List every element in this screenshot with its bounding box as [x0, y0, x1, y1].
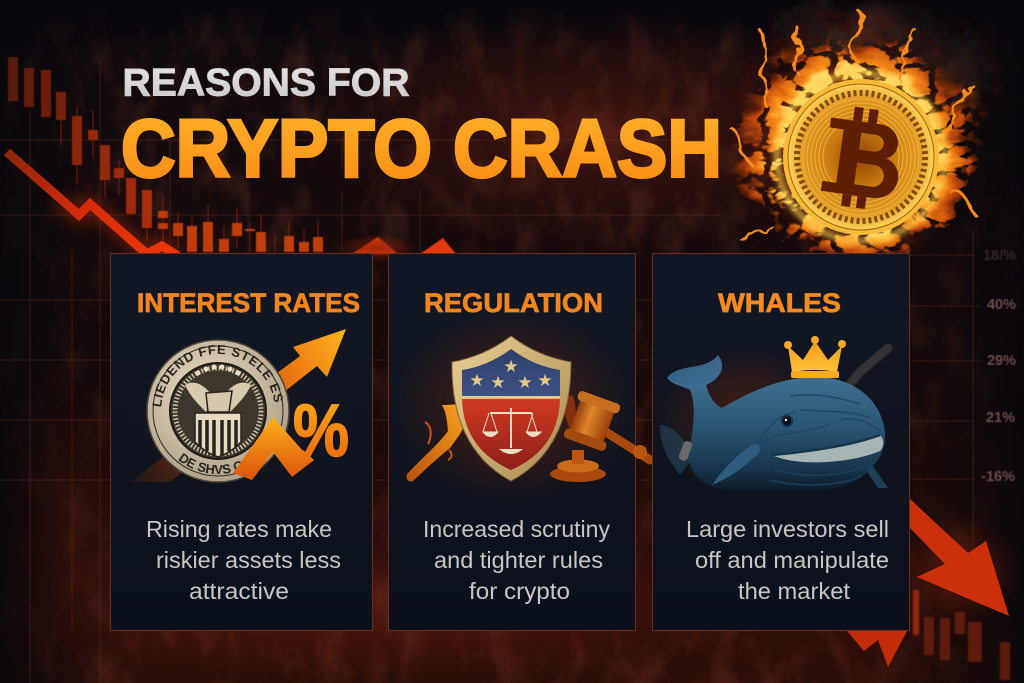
seal eagle wings — [185, 383, 251, 412]
icon: shield — [452, 336, 571, 481]
description: riskier assets less — [156, 547, 341, 573]
right axis labels: 40% — [987, 297, 1016, 313]
description: and tighter rules — [434, 547, 603, 573]
icon: whale — [660, 355, 888, 491]
description: for crypto — [469, 578, 570, 604]
heading: REGULATION — [424, 288, 603, 318]
candlestick chart: upper left — [8, 57, 323, 252]
right axis labels: 29% — [987, 353, 1016, 369]
icon: percent sign: % — [293, 389, 349, 472]
panel: interest rates — [110, 253, 373, 631]
icon: central bank seal: LIEDEND FFE STELE ES — [152, 344, 283, 407]
stars: ★ — [469, 371, 485, 390]
panel: regulation — [388, 254, 650, 630]
icon: smoke wisp — [850, 348, 888, 384]
right axis labels: 21% — [986, 410, 1015, 426]
whale wrinkles — [760, 395, 880, 485]
description: Large investors sell — [686, 516, 889, 542]
scales of justice — [483, 408, 541, 453]
coin — [783, 79, 939, 235]
description: attractive — [189, 578, 289, 604]
description — [686, 516, 889, 604]
stars — [469, 357, 553, 392]
description: Increased scrutiny — [423, 516, 610, 542]
whale fin — [712, 444, 760, 485]
red falling line — [7, 152, 456, 262]
icon: crown — [784, 336, 846, 378]
description: the market — [738, 578, 851, 604]
bitcoin symbol — [819, 104, 907, 213]
flame halo — [751, 40, 961, 256]
right axis labels: -16% — [981, 469, 1015, 485]
whale eye — [781, 415, 793, 427]
icon: rising arrow — [130, 329, 346, 482]
description: Rising rates make — [146, 516, 332, 542]
stars: ★ — [490, 373, 506, 392]
stars: ★ — [517, 373, 533, 392]
burning bitcoin — [728, 0, 1010, 261]
right axis labels: 18/% — [983, 248, 1016, 264]
right axis labels — [981, 248, 1016, 485]
icon: central bank seal — [146, 339, 290, 483]
flames — [734, 9, 978, 261]
icon: central bank seal: DE SHVS GOAL — [178, 453, 241, 474]
stars: ★ — [503, 357, 519, 376]
whale mouth — [772, 435, 883, 462]
icon: gavel — [550, 390, 650, 482]
description — [423, 516, 610, 604]
icon: flame arrow — [406, 402, 468, 482]
title line: Reasons for: REASONS FOR — [122, 62, 410, 104]
heading: WHALES — [718, 288, 841, 318]
seal shield — [195, 413, 241, 457]
faint candles bottom right — [913, 590, 1010, 680]
red arrow bottom right — [847, 499, 1020, 667]
icon: zigzag arrow — [233, 417, 314, 480]
stars: ★ — [537, 371, 553, 390]
title line: Crypto Crash: CRYPTO CRASH — [121, 104, 722, 194]
description: off and manipulate — [695, 547, 889, 573]
panel: whales — [652, 254, 910, 630]
heading: INTEREST RATES — [137, 288, 360, 318]
description — [146, 516, 341, 604]
smoke — [765, 0, 1010, 130]
flame wisps — [728, 12, 975, 240]
